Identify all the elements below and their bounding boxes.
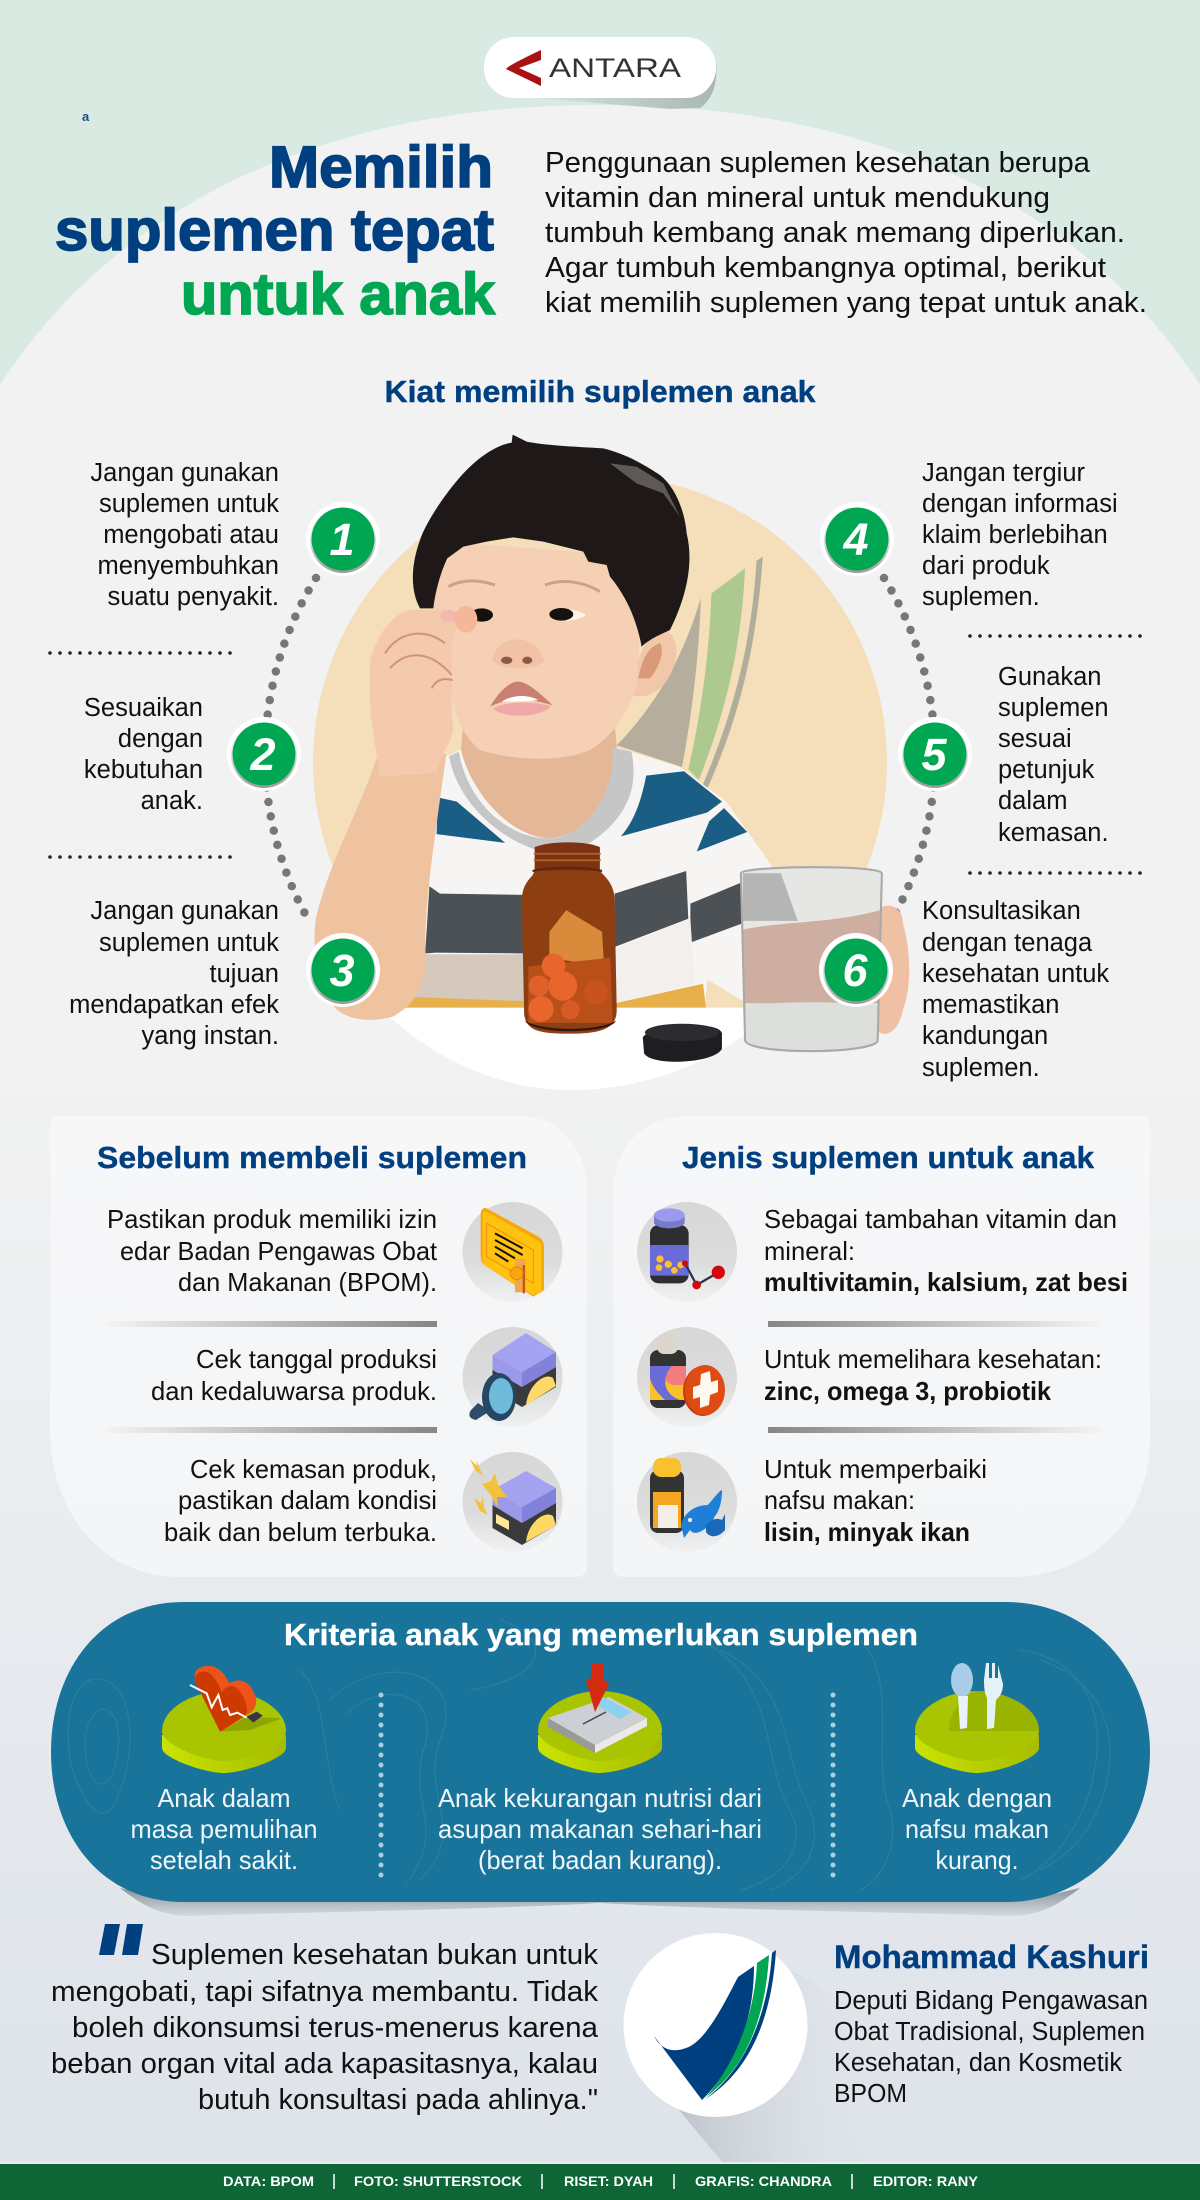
panel: kriteria anak bbox=[51, 1602, 1150, 1902]
icon: certificate bbox=[462, 1202, 562, 1302]
badge 5 bbox=[898, 717, 972, 791]
tip 3: tujuan bbox=[210, 960, 279, 988]
item 2 text bbox=[151, 1344, 437, 1406]
footer: RISET: DYAH bbox=[564, 2173, 653, 2189]
panel heading: Kriteria anak yang memerlukan suplemen bbox=[284, 1617, 918, 1652]
divider bbox=[105, 1321, 437, 1327]
intro paragraph: Agar tumbuh kembangnya optimal, berikut bbox=[545, 252, 1106, 284]
intro paragraph: tumbuh kembang anak memang diperlukan. bbox=[545, 217, 1125, 249]
tip 6: Konsultasikan bbox=[922, 897, 1081, 925]
tip 5: sesuai bbox=[998, 725, 1072, 753]
eyes bbox=[470, 608, 586, 622]
hand bbox=[370, 606, 477, 777]
criterion 3 text: nafsu makan bbox=[905, 1814, 1049, 1844]
brows bbox=[448, 581, 600, 592]
criterion 2 text: (berat badan kurang). bbox=[478, 1845, 722, 1875]
criterion 2 text: Anak kekurangan nutrisi dari bbox=[438, 1783, 762, 1813]
intro paragraph bbox=[545, 147, 1147, 319]
tip 5: kemasan. bbox=[998, 819, 1109, 847]
item 1 text: dan Makanan (BPOM). bbox=[178, 1267, 437, 1297]
ear bbox=[630, 631, 676, 696]
badge 6 bbox=[819, 933, 893, 1007]
background circle bbox=[313, 475, 887, 1049]
shadow below criteria panel bbox=[120, 1888, 1080, 1916]
criterion 1 text: setelah sakit. bbox=[150, 1845, 298, 1875]
tip 1: suplemen untuk bbox=[99, 490, 279, 518]
criterion 2 text: asupan makanan sehari-hari bbox=[438, 1814, 762, 1844]
tip 4: klaim berlebihan bbox=[922, 521, 1108, 549]
item 3 text: lisin, minyak ikan bbox=[764, 1517, 970, 1547]
footer bbox=[0, 2162, 1200, 2200]
criterion 2 text bbox=[438, 1783, 762, 1875]
tip 1: Jangan gunakan bbox=[90, 459, 279, 487]
divider bbox=[768, 1427, 1102, 1433]
tip 5 bbox=[998, 663, 1109, 847]
face bbox=[433, 543, 640, 759]
bottle bbox=[522, 842, 617, 1034]
shirt bbox=[354, 747, 772, 1008]
item 1 text: mineral: bbox=[764, 1236, 855, 1266]
arm bbox=[315, 732, 446, 1020]
photo: boy head and hand bbox=[370, 435, 689, 777]
panel heading: Sebelum membeli suplemen bbox=[97, 1140, 527, 1175]
footer: EDITOR: RANY bbox=[873, 2173, 979, 2189]
tip 4: Jangan tergiur bbox=[922, 459, 1086, 487]
quote text: boleh dikonsumsi terus-menerus karena bbox=[72, 2012, 599, 2044]
criterion 1 text: Anak dalam bbox=[158, 1783, 290, 1813]
item 2 text: Cek tanggal produksi bbox=[196, 1344, 437, 1374]
tip 2: anak. bbox=[141, 787, 203, 815]
tip 1: menyembuhkan bbox=[98, 552, 279, 580]
tip 6 bbox=[922, 897, 1109, 1082]
title: suplemen tepat bbox=[55, 198, 494, 263]
tip 2: dengan bbox=[118, 725, 203, 753]
item 3 text: Untuk memperbaiki bbox=[764, 1454, 987, 1484]
tip 4 bbox=[922, 459, 1118, 611]
tip 6: memastikan bbox=[922, 991, 1059, 1019]
item 3 text: pastikan dalam kondisi bbox=[178, 1485, 437, 1515]
bottle cap bbox=[643, 1024, 722, 1062]
tip 1: suatu penyakit. bbox=[107, 583, 279, 611]
title bbox=[55, 135, 496, 327]
badge 1: 1 bbox=[329, 514, 355, 565]
logo: ANTARA: ANTARA bbox=[549, 53, 681, 83]
item 1 text bbox=[107, 1204, 438, 1297]
item 1 text: edar Badan Pengawas Obat bbox=[120, 1236, 438, 1266]
speaker role: Deputi Bidang Pengawasan bbox=[834, 1987, 1148, 2015]
tip 3: suplemen untuk bbox=[99, 929, 279, 957]
icon: sealed box bbox=[462, 1452, 562, 1552]
divider bbox=[768, 1321, 1102, 1327]
badge 4: 4 bbox=[842, 514, 869, 565]
badge 4 bbox=[820, 502, 894, 576]
badge 1 bbox=[306, 502, 380, 576]
intro paragraph: vitamin dan mineral untuk mendukung bbox=[545, 182, 1050, 214]
divider bbox=[105, 1427, 437, 1433]
tip 4: dengan informasi bbox=[922, 490, 1118, 518]
tip 6: dengan tenaga bbox=[922, 929, 1093, 957]
item 1 text bbox=[764, 1204, 1128, 1297]
heading: kiat: Kiat memilih suplemen anak bbox=[384, 374, 816, 409]
quote text: mengobati, tapi sifatnya membantu. Tidak bbox=[51, 1976, 598, 2008]
hair bbox=[413, 435, 689, 647]
criterion 1 text bbox=[130, 1783, 318, 1875]
icon: spoon and fork on pedestal bbox=[915, 1663, 1039, 1773]
item 3 text: Cek kemasan produk, bbox=[190, 1454, 437, 1484]
criterion 3 text: Anak dengan bbox=[902, 1783, 1052, 1813]
tip 2: kebutuhan bbox=[84, 756, 203, 784]
panel: jenis suplemen untuk anak bbox=[613, 1116, 1150, 1577]
quote text: Suplemen kesehatan bukan untuk bbox=[151, 1939, 599, 1971]
criterion 3 text bbox=[902, 1783, 1052, 1875]
logo stripes bbox=[617, 557, 763, 789]
item 2 text: Untuk memelihara kesehatan: bbox=[764, 1344, 1102, 1374]
photo: bottle, cap and glass bbox=[522, 842, 909, 1062]
right hand bbox=[878, 906, 909, 1034]
photo: boy body and table bbox=[315, 557, 777, 1090]
criterion 1 text: masa pemulihan bbox=[130, 1814, 318, 1844]
badge 5: 5 bbox=[921, 729, 947, 780]
nose bbox=[493, 639, 544, 668]
item 2 text: zinc, omega 3, probiotik bbox=[764, 1376, 1052, 1406]
tip 4: dari produk bbox=[922, 552, 1050, 580]
item 2 text: dan kedaluwarsa produk. bbox=[151, 1376, 437, 1406]
tip 2: Sesuaikan bbox=[84, 694, 203, 722]
tip 6: kesehatan untuk bbox=[922, 960, 1109, 988]
intro paragraph: Penggunaan suplemen kesehatan berupa bbox=[545, 147, 1090, 179]
title: Memilih bbox=[269, 135, 493, 200]
tip 3: mendapatkan efek bbox=[69, 991, 279, 1019]
speaker role: Obat Tradisional, Suplemen bbox=[834, 2018, 1145, 2046]
item 1 text: Pastikan produk memiliki izin bbox=[107, 1204, 437, 1234]
footer: GRAFIS: CHANDRA bbox=[695, 2173, 832, 2189]
item 2 text bbox=[764, 1344, 1102, 1406]
title: untuk anak bbox=[181, 262, 496, 327]
tip 5: Gunakan bbox=[998, 663, 1102, 691]
dotted arcs bbox=[265, 578, 935, 921]
icon: bottle with fish bbox=[637, 1452, 737, 1552]
icon: heart on pedestal bbox=[162, 1666, 286, 1773]
speaker name: Mohammad Kashuri bbox=[834, 1939, 1149, 1975]
icon: bottle with cross bbox=[637, 1327, 737, 1427]
steps: number badges bbox=[227, 502, 972, 1007]
badge 6: 6 bbox=[842, 945, 868, 996]
small mark: a bbox=[82, 109, 90, 124]
tip 2 bbox=[84, 694, 203, 815]
tip 5: suplemen bbox=[998, 694, 1109, 722]
mouth bbox=[490, 682, 553, 716]
item 3 text bbox=[764, 1454, 987, 1547]
quote mark bbox=[99, 1924, 143, 1955]
icon: box with magnifier bbox=[462, 1327, 562, 1427]
tip 5: petunjuk bbox=[998, 756, 1095, 784]
glass of water bbox=[741, 867, 882, 1051]
item 3 text: nafsu makan: bbox=[764, 1485, 915, 1515]
quote text: butuh konsultasi pada ahlinya." bbox=[198, 2084, 598, 2116]
badge 3 bbox=[306, 933, 380, 1007]
badge 2 bbox=[227, 717, 301, 791]
footer: DATA: BPOM bbox=[223, 2173, 314, 2189]
intro paragraph: kiat memilih suplemen yang tepat untuk anak. bbox=[545, 287, 1147, 319]
tip 6: suplemen. bbox=[922, 1054, 1040, 1082]
tip 1: mengobati atau bbox=[103, 521, 279, 549]
logo: BPOM bbox=[624, 1933, 1000, 2163]
badge 3: 3 bbox=[329, 945, 355, 996]
icon: multivitamin bottle bbox=[637, 1202, 737, 1302]
footer: FOTO: SHUTTERSTOCK bbox=[354, 2173, 522, 2189]
item 1 text: multivitamin, kalsium, zat besi bbox=[764, 1267, 1128, 1297]
tip 3: yang instan. bbox=[141, 1022, 279, 1050]
item 3 text: baik dan belum terbuka. bbox=[164, 1517, 437, 1547]
logo: ANTARA bbox=[484, 37, 716, 109]
tip 3: Jangan gunakan bbox=[90, 897, 279, 925]
neck bbox=[461, 702, 617, 839]
speaker role: BPOM bbox=[834, 2080, 907, 2108]
quote text: beban organ vital ada kapasitasnya, kalau bbox=[51, 2048, 598, 2080]
speaker role bbox=[834, 1987, 1148, 2108]
hair highlights bbox=[610, 463, 680, 517]
tip 5: dalam bbox=[998, 787, 1067, 815]
tip 1 bbox=[90, 459, 279, 611]
item 3 text bbox=[164, 1454, 437, 1547]
tip 3 bbox=[69, 897, 279, 1050]
tip 4: suplemen. bbox=[922, 583, 1040, 611]
badge 2: 2 bbox=[249, 729, 276, 780]
panel heading: Jenis suplemen untuk anak bbox=[682, 1140, 1095, 1175]
icon: scale on pedestal bbox=[538, 1663, 662, 1773]
item 1 text: Sebagai tambahan vitamin dan bbox=[764, 1204, 1117, 1234]
panel: sebelum membeli suplemen bbox=[50, 1116, 587, 1577]
table bbox=[389, 1008, 777, 1090]
dotted dividers bbox=[381, 1695, 833, 1880]
tip 6: kandungan bbox=[922, 1022, 1048, 1050]
quote text bbox=[51, 1939, 599, 2116]
criterion 3 text: kurang. bbox=[936, 1845, 1018, 1875]
collar bbox=[449, 747, 634, 856]
speaker role: Kesehatan, dan Kosmetik bbox=[834, 2049, 1122, 2077]
